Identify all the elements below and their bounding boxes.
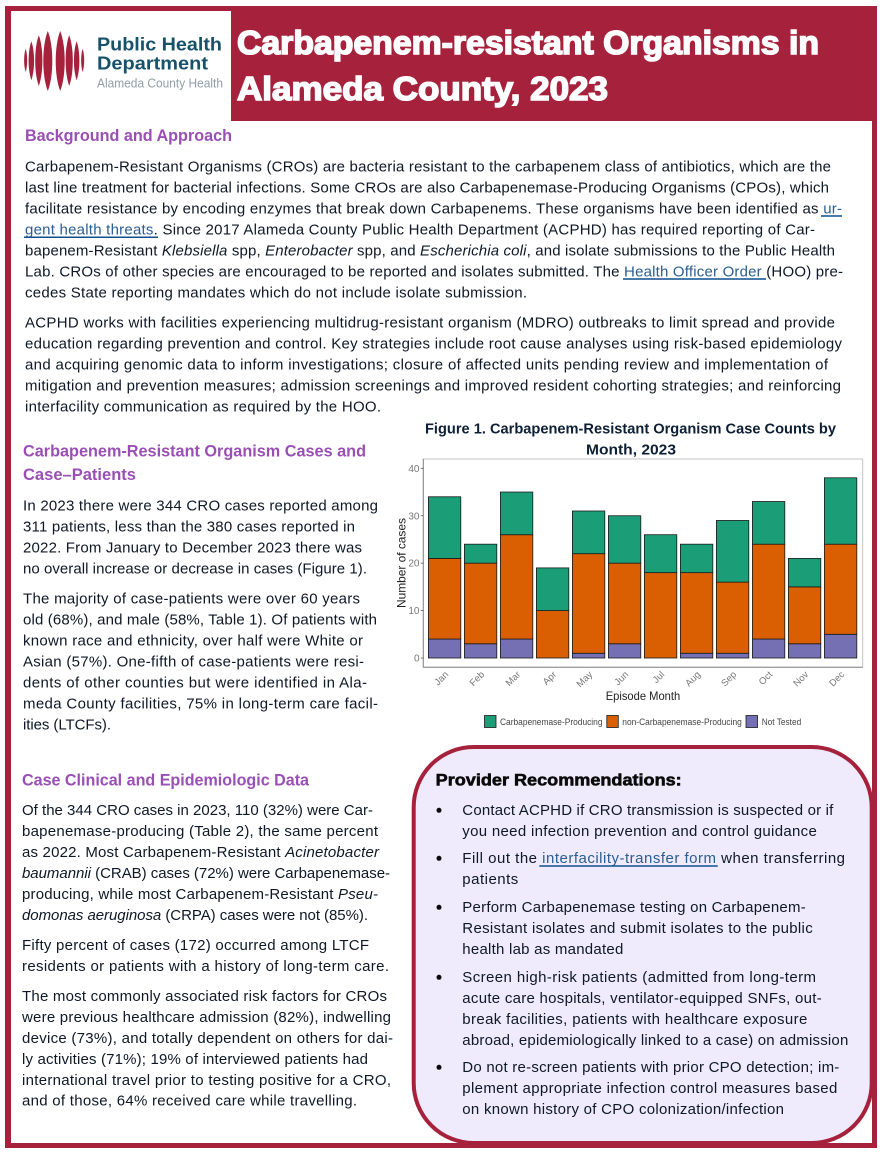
- text block: risk factors: and of those, 64% received care while travelling.: [22, 1092, 357, 1109]
- text block: background paragraph 1: Carbapenem-Resistant Organisms (CROs) are bacteria resistant to the carbapenem class of antibiotics, which are the: [25, 158, 831, 175]
- figure title: Figure 1. Carbapenem-Resistant Organism Case Counts by: [425, 421, 836, 437]
- text block: demographics: The majority of case-patients were over 60 years: [23, 590, 360, 607]
- text block: background paragraph 2: interfacility communication as required by the HOO.: [25, 398, 381, 416]
- panel: cases and case-patients: [23, 443, 378, 734]
- text block: risk factors: were previous healthcare admission (82%), indwelling: [21, 1009, 391, 1026]
- x axis month labels: [433, 669, 847, 690]
- stacked bars: [428, 478, 857, 658]
- text block: risk factors: ly activities (71%); 19% of interviewed patients had: [22, 1051, 368, 1068]
- x axis title: Episode Month: [606, 689, 680, 703]
- heading: cases and case-patients: [23, 443, 366, 484]
- text block: risk factors: international travel prior to testing positive for a CRO,: [22, 1072, 391, 1089]
- x axis month labels: Jan: [433, 669, 451, 688]
- logo wordmark: Public Health: [97, 34, 222, 55]
- recommendation: transfer form: patients: [462, 871, 518, 888]
- title: Alameda County, 2023: [237, 71, 608, 108]
- recommendation: re-screening: plement appropriate infection control measures based: [462, 1080, 837, 1097]
- logo wordmark: Alameda County Health: [97, 76, 223, 91]
- chart legend: Not Tested: [762, 717, 801, 727]
- x axis month labels: Aug: [683, 669, 703, 689]
- recommendation: screening: break facilities, patients with healthcare exposure: [462, 1011, 807, 1028]
- heading: cases and case-patients: Case–Patients: [23, 466, 136, 484]
- text block: long-term care: Fifty percent of cases (172) occurred among LTCF: [22, 937, 369, 954]
- text block: demographics: dents of other counties but were identified in Ala-: [23, 674, 367, 691]
- logo wordmark: [97, 34, 223, 91]
- x axis month labels: Dec: [827, 669, 847, 689]
- title: Carbapenem-resistant Organisms in: [237, 25, 819, 62]
- header banner: [5, 6, 877, 121]
- text block: risk factors: device (73%), and totally dependent on others for dai-: [22, 1030, 393, 1047]
- y axis ticks: 30: [408, 511, 420, 522]
- text block: risk factors: [21, 988, 393, 1109]
- recommendation: carbapenemase testing: health lab as mandated: [462, 941, 623, 958]
- text block: background paragraph 2: [25, 314, 842, 416]
- text block: demographics: known race and ethnicity, over half were White or: [23, 632, 363, 649]
- text block: carbapenemase-producing share: as 2022. Most Carbapenem-Resistant Acinetobacter: [22, 844, 380, 861]
- x axis month labels: Oct: [757, 669, 775, 688]
- text block: background paragraph 1: bapenem-Resistant Klebsiella spp, Enterobacter spp, and Escherichia coli, and isolate submissions to the Public Health: [25, 242, 835, 259]
- x axis month labels: May: [575, 669, 595, 690]
- chart legend: non-Carbapenemase-Producing: [622, 717, 742, 727]
- x axis month labels: Nov: [791, 669, 811, 689]
- heading: background and approach: Background and Approach: [25, 127, 232, 145]
- text block: background paragraph 2: education regarding prevention and control. Key strategies include root cause analyses using risk-based epidemiology: [25, 335, 842, 352]
- y axis ticks: [408, 464, 423, 664]
- recommendation: screening: [436, 969, 848, 1049]
- text block: long-term care: residents or patients with a history of long-term care.: [22, 958, 389, 975]
- panel: provider recommendations: [414, 747, 872, 1143]
- y axis ticks: 40: [408, 464, 420, 475]
- text block: long-term care: [22, 937, 389, 975]
- text block: demographics: Asian (57%). One-fifth of case-patients were resi-: [23, 653, 364, 670]
- text block: case counts: [23, 498, 378, 578]
- text block: background paragraph 1: facilitate resistance by encoding enzymes that break down Carbapenems. These organisms have been identified as ur-: [25, 200, 842, 217]
- text block: case counts: 2022. From January to December 2023 there was: [23, 540, 362, 557]
- recommendation: screening: abroad, epidemiologically linked to a case) on admission: [462, 1032, 848, 1049]
- text block: carbapenemase-producing share: baumannii (CRAB) cases (72%) were Carbapenemase-: [22, 865, 390, 882]
- recommendation: transfer form: Fill out the interfacility-transfer form when transferring: [462, 850, 845, 867]
- text block: background paragraph 1: Lab. CROs of other species are encouraged to be reported and isolates submitted. The Health Officer Order (HOO) pre-: [25, 263, 843, 280]
- recommendation: re-screening: Do not re-screen patients with prior CPO detection; im-: [462, 1059, 839, 1076]
- x axis month labels: Apr: [541, 669, 559, 688]
- panel: background and approach: [24, 127, 843, 416]
- text block: carbapenemase-producing share: [22, 802, 390, 924]
- heading: cases and case-patients: Carbapenem-Resistant Organism Cases and: [23, 443, 366, 461]
- text block: background paragraph 1: [24, 158, 843, 301]
- y axis ticks: 20: [408, 559, 420, 570]
- chart legend: [484, 716, 801, 728]
- chart legend: Carbapenemase-Producing: [500, 717, 602, 727]
- x axis month labels: Feb: [468, 669, 487, 689]
- recommendation: carbapenemase testing: [436, 899, 813, 958]
- figure title: Month, 2023: [586, 442, 676, 458]
- logo: [24, 31, 223, 91]
- recommendation: carbapenemase testing: Perform Carbapenemase testing on Carbapenem-: [462, 899, 806, 916]
- text block: background paragraph 2: and acquiring genomic data to inform investigations; closure of affected units pending review and implementation of: [25, 356, 829, 373]
- text block: case counts: no overall increase or decrease in cases (Figure 1).: [23, 561, 367, 578]
- recommendation: screening: Screen high-risk patients (admitted from long-term: [462, 969, 816, 986]
- recommendation: re-screening: on known history of CPO colonization/infection: [462, 1101, 784, 1118]
- bar chart: [395, 459, 863, 728]
- heading: clinical and epidemiologic data: Case Clinical and Epidemiologic Data: [22, 771, 310, 789]
- y axis ticks: 0: [414, 654, 420, 664]
- x axis month labels: Jul: [651, 669, 667, 686]
- text block: case counts: In 2023 there were 344 CRO cases reported among: [23, 498, 378, 515]
- figure title: [425, 421, 836, 458]
- heading: provider recommendations: Provider Recommendations:: [436, 771, 682, 790]
- text block: carbapenemase-producing share: producing, while most Carbapenem-Resistant Pseu-: [22, 886, 378, 903]
- text block: background paragraph 2: mitigation and prevention measures; admission screenings and improved resident cohorting strategies; and reinforcing: [25, 377, 841, 394]
- text block: demographics: [23, 590, 378, 734]
- text block: risk factors: The most commonly associated risk factors for CROs: [22, 988, 387, 1005]
- recommendation: screening: acute care hospitals, ventilator-equipped SNFs, out-: [462, 990, 822, 1007]
- y axis title: Number of cases: [395, 518, 409, 608]
- panel: clinical and epidemiologic data: [21, 771, 393, 1109]
- text block: background paragraph 1: gent health threats. Since 2017 Alameda County Public Health Department (ACPHD) has required reporting of Car-: [25, 221, 815, 238]
- title: [237, 25, 819, 108]
- recommendation: transfer form: [436, 850, 845, 888]
- recommendation: contact ACPHD: [436, 802, 834, 840]
- icon: striped oval: [24, 31, 84, 91]
- text block: demographics: meda County facilities, 75% in long-term care facil-: [23, 695, 378, 712]
- text block: carbapenemase-producing share: bapenemase-producing (Table 2), the same percent: [22, 823, 379, 840]
- recommendation: carbapenemase testing: Resistant isolates and submit isolates to the public: [462, 920, 813, 937]
- x axis month labels: Jun: [613, 669, 631, 688]
- text block: case counts: 311 patients, less than the 380 cases reported in: [23, 519, 355, 536]
- recommendation: contact ACPHD: Contact ACPHD if CRO transmission is suspected or if: [462, 802, 834, 819]
- recommendation: contact ACPHD: you need infection prevention and control guidance: [462, 823, 817, 840]
- text block: background paragraph 1: last line treatment for bacterial infections. Some CROs are also Carbapenemase-Producing Organisms (CPOs), which: [25, 179, 829, 196]
- text block: carbapenemase-producing share: Of the 344 CRO cases in 2023, 110 (32%) were Car-: [22, 802, 373, 819]
- x axis month labels: Sep: [719, 669, 739, 689]
- x axis month labels: Mar: [504, 669, 523, 689]
- recommendation: re-screening: [436, 1059, 839, 1118]
- text block: demographics: old (68%), and male (58%, Table 1). Of patients with: [23, 611, 377, 628]
- text block: background paragraph 2: ACPHD works with facilities experiencing multidrug-resistant organism (MDRO) outbreaks to limit spread and provide: [25, 314, 835, 331]
- text block: demographics: ities (LTCFs).: [23, 716, 111, 734]
- text block: background paragraph 1: cedes State reporting mandates which do not include isolate submission.: [25, 284, 527, 301]
- y axis ticks: 10: [408, 606, 420, 617]
- text block: carbapenemase-producing share: domonas aeruginosa (CRPA) cases were not (85%).: [22, 907, 368, 924]
- logo wordmark: Department: [97, 52, 208, 73]
